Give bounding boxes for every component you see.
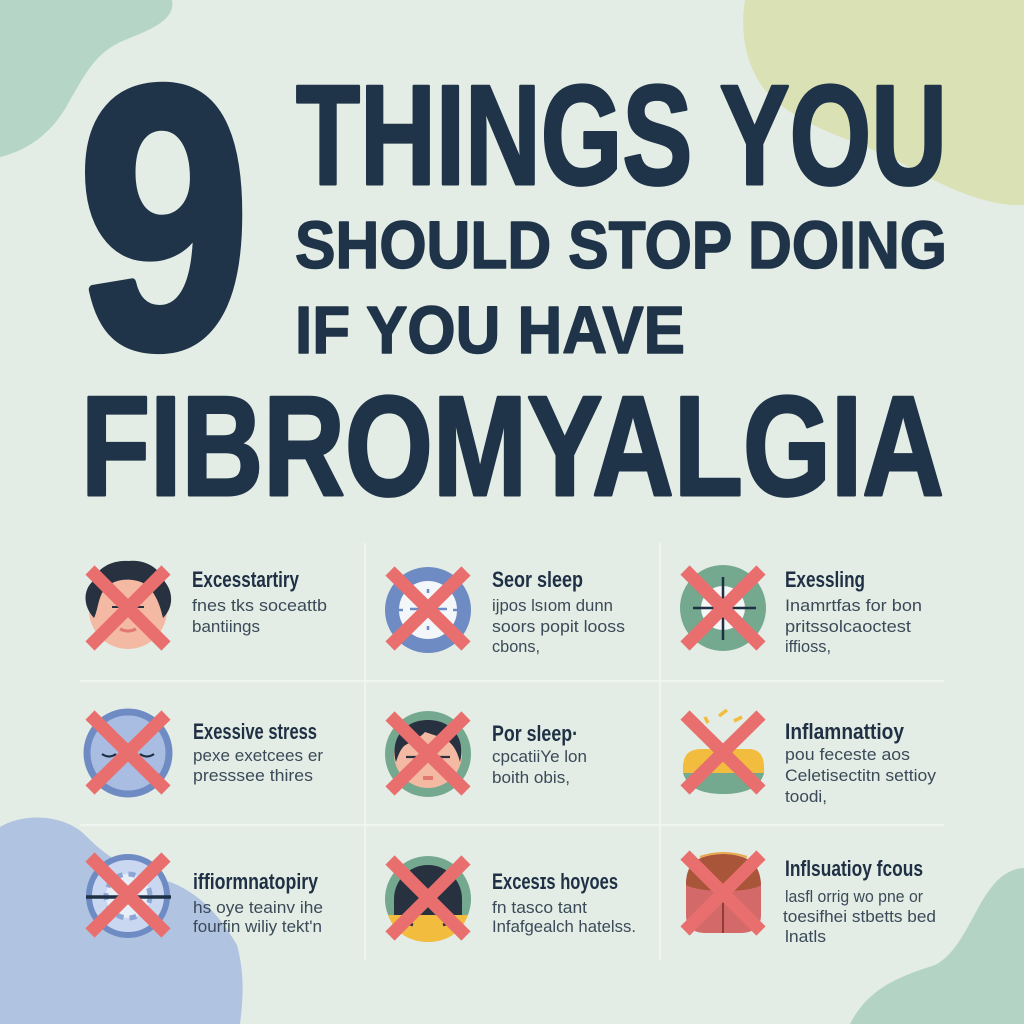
description: iffioss, [785,637,831,656]
title line: should stop doing: SHOULD STOP DOING [295,208,947,283]
description [492,898,636,936]
icon: food bowl crossed out [683,710,764,794]
description: ijpos lsıom dunn [492,596,613,615]
item 6 [683,710,937,806]
description [492,747,587,787]
description: pexe exetcees er [193,746,323,765]
icon: green target crossed out [680,565,766,651]
description: toodi, [785,787,827,806]
description [193,746,323,785]
item 9 [685,853,936,946]
icon: clock crossed out [390,571,466,646]
heading: Inflamnattioy [785,719,905,744]
description [192,596,327,636]
icon: dark dome and yellow circle crossed out [385,856,471,942]
description: cpcatiiYe lon [492,747,587,766]
icon: red container crossed out [685,853,761,933]
item 5 [385,711,587,797]
big number 9: 9 [78,9,250,425]
blob: top right [743,0,1024,205]
description [785,745,937,806]
title [78,9,947,526]
description [492,596,625,656]
item 8 [385,856,636,942]
heading: Exessling [785,567,865,592]
item 2 [390,567,625,656]
title line: if you have: IF YOU HAVE [295,293,685,368]
icon: tired face in green ring crossed out [385,711,471,797]
item 3 [680,565,922,656]
icon: face with dark hair crossed out [86,561,171,649]
description: boith obis, [492,768,570,787]
heading: Excesɪs hoyoes [492,869,618,894]
description: Inamrtfas for bon [785,596,922,615]
heading: Excesstartiry [192,567,300,592]
description: cbons, [492,637,540,656]
description [193,898,323,936]
description: pou feceste aos [785,745,910,764]
description: fn tasco tant [492,898,587,917]
description: fnes tks soceattb [192,596,327,615]
description: lasfl orrig wo pne or [785,887,923,906]
description: Celetisectitn settioy [785,766,937,785]
description: soors popit looss [492,617,625,636]
blob: bottom left [0,818,243,1024]
description: toesifhei stbetts bed [783,907,936,926]
item 1 [86,561,327,649]
heading: iffiormnatopiry [193,869,319,894]
heading: Seor sleep [492,567,583,592]
heading: Por sleep· [492,721,578,746]
item 4 [87,712,323,794]
description: pritssolcaoctest [785,617,911,636]
item 7 [86,857,323,936]
blob: bottom right [850,868,1024,1024]
description: presssee thires [193,766,313,785]
description: fourfin wiliy tekt'n [193,917,322,936]
blob: top left [0,0,172,157]
heading: Inflsuatioy fcous [785,856,923,881]
icon: blue dotted circle crossed out [86,857,171,935]
description: Infafgealch hatelss. [492,917,636,936]
description: hs oye teainv ihe [193,898,323,917]
description [785,596,922,656]
description: lnatls [785,927,826,946]
heading: Exessive stress [193,719,317,744]
description [783,887,936,946]
description: bantiings [192,617,260,636]
icon: sleeping face circle crossed out [87,712,169,794]
